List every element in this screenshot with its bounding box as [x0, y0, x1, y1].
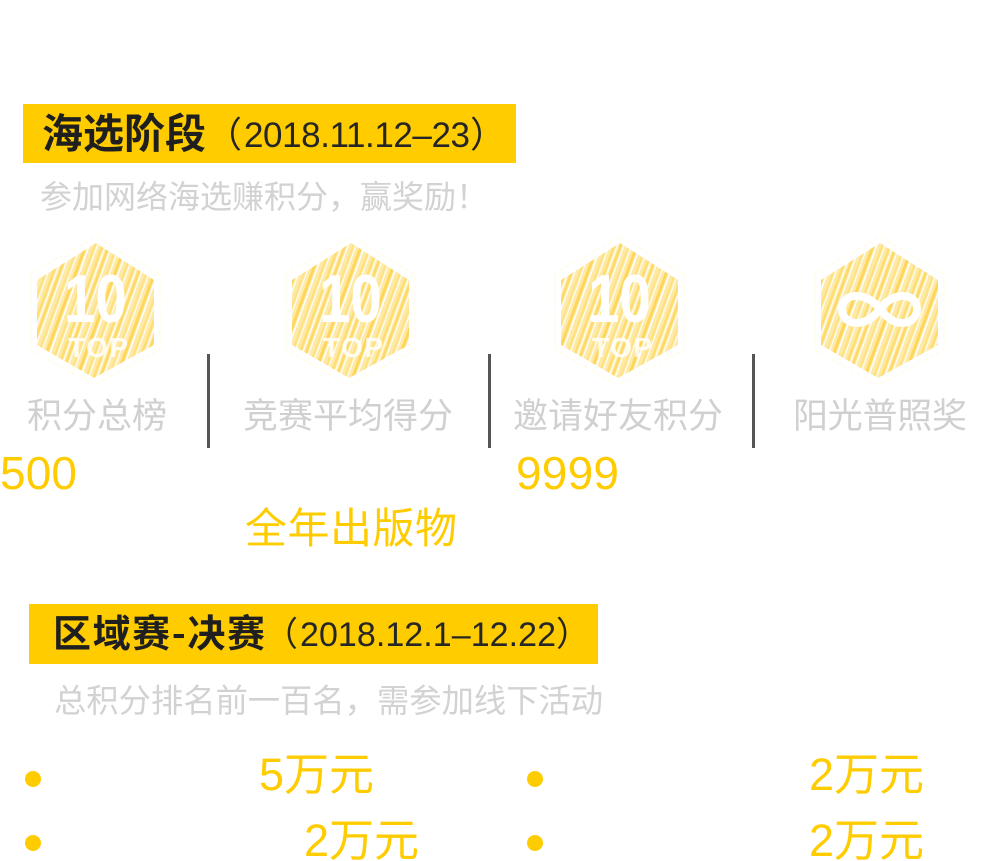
prize row: top left [25, 738, 374, 803]
badge: 邀请好友积分 top 10 [555, 237, 684, 385]
section header: 区域赛-决赛: 2018.12.1–12.22 [300, 616, 556, 654]
divider 1 [207, 354, 210, 448]
badge: 竞赛平均得分 top 10 [286, 237, 415, 385]
section header: 区域赛-决赛: 区域赛-决赛 [53, 603, 265, 658]
value: 500: 500 [0, 447, 77, 499]
subtitle: 海选说明: 参加网络海选赚积分，赢奖励！ [40, 172, 488, 218]
section header: 海选阶段: 海选阶段 [42, 100, 206, 160]
badge: 邀请好友积分 top 10: TOP [592, 332, 652, 363]
badge: 积分总榜 top 10: 10 [64, 261, 127, 337]
badge: 竞赛平均得分 top 10: 10 [319, 261, 382, 337]
section header: 区域赛-决赛: ） [556, 607, 590, 656]
section header: 海选阶段: ） [470, 106, 506, 158]
prize row: top left: 5万元 [259, 738, 374, 803]
prize row: top right [527, 738, 924, 803]
divider 2 [488, 354, 491, 448]
label: 积分总榜: 积分总榜 [27, 388, 167, 439]
prize row: bottom right [527, 804, 924, 861]
section header: 区域赛-决赛: （ [264, 607, 298, 656]
badge: 邀请好友积分 top 10: 10 [588, 261, 651, 337]
badge: 竞赛平均得分 top 10: TOP [323, 332, 383, 363]
section header: 区域赛-决赛 [29, 603, 598, 664]
value: 全年出版物: 全年出版物 [245, 495, 457, 556]
badge: 阳光普照奖 infinity [815, 237, 944, 385]
label: 邀请好友积分: 邀请好友积分 [513, 388, 723, 439]
label: 阳光普照奖: 阳光普照奖 [793, 388, 967, 439]
badge: 积分总榜 top 10 [31, 237, 160, 385]
section header: 海选阶段 [23, 100, 516, 163]
label: 竞赛平均得分: 竞赛平均得分 [243, 388, 453, 439]
subtitle: 区域赛说明: 总积分排名前一百名，需参加线下活动 [54, 676, 603, 722]
value: 9999: 9999 [516, 447, 619, 499]
section header: 海选阶段: （ [206, 106, 242, 158]
divider 3 [752, 354, 755, 448]
badge: 积分总榜 top 10: TOP [68, 332, 128, 363]
section header: 海选阶段: 2018.11.12–23 [244, 116, 470, 155]
prize row: bottom left [25, 804, 419, 861]
prize row: top right: 2万元 [809, 738, 924, 803]
